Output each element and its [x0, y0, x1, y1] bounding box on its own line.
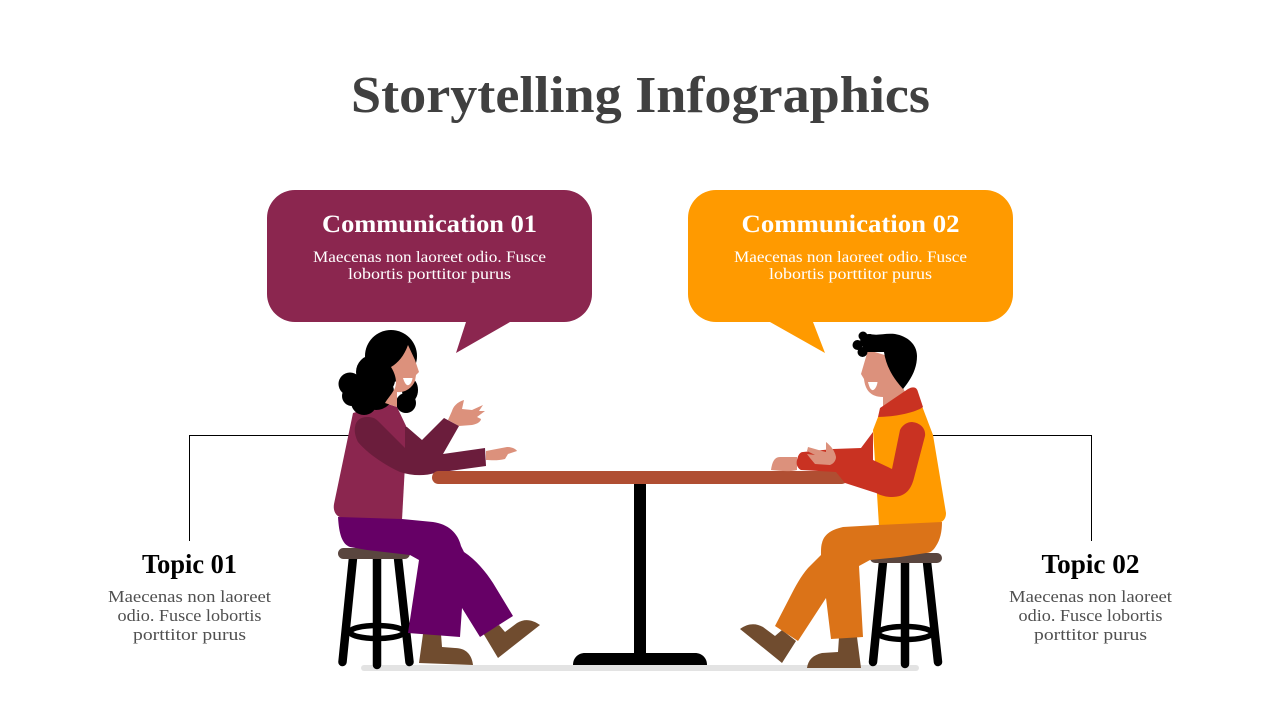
woman trousers — [338, 517, 513, 637]
woman hair back curl — [396, 378, 418, 413]
floor shadow — [361, 665, 919, 671]
man mouth — [868, 382, 878, 390]
speech bubble: communication 01: Maecenas non laoreet odio. Fusce — [313, 249, 546, 266]
woman arm — [355, 417, 486, 475]
topic 02 block: odio. Fusce lobortis — [1018, 606, 1162, 625]
right stool — [870, 553, 942, 664]
connector line: topic 01 — [190, 436, 352, 541]
topic 01 block: Maecenas non laoreet — [108, 587, 271, 606]
topic 02 block: Topic 02 — [1042, 549, 1140, 579]
man boots — [740, 624, 861, 668]
topic 01 block: odio. Fusce lobortis — [118, 606, 262, 625]
speech bubble: communication 02: lobortis porttitor purus — [769, 266, 932, 283]
woman torso — [334, 403, 407, 520]
title: Storytelling Infographics — [351, 67, 930, 124]
table — [432, 471, 848, 665]
man hair — [852, 332, 917, 389]
man torso — [873, 406, 946, 526]
topic 01 block: Topic 01 — [142, 549, 237, 579]
woman figure — [334, 330, 540, 665]
speech bubble: communication 01: Communication 01 — [322, 211, 537, 238]
topic 01 block: porttitor purus — [133, 625, 246, 644]
connector line: topic 02 — [930, 436, 1092, 541]
man neck and face — [861, 350, 905, 407]
woman boots — [419, 620, 540, 665]
speech bubble: communication 02 — [688, 190, 1013, 353]
man lower hand — [771, 457, 797, 471]
woman mouth — [403, 378, 412, 385]
man arm — [797, 422, 925, 497]
speech bubble: communication 01: lobortis porttitor purus — [348, 266, 511, 283]
woman hair — [338, 330, 417, 415]
man figure — [740, 332, 946, 668]
man hood — [878, 387, 923, 417]
woman hands — [448, 400, 517, 460]
speech bubble: communication 01 — [267, 190, 592, 353]
woman neck and face — [385, 345, 419, 407]
topic 02 block: porttitor purus — [1034, 625, 1147, 644]
topic 02 block: Maecenas non laoreet — [1009, 587, 1172, 606]
topic 02 block — [1009, 549, 1172, 644]
speech bubble: communication 02: Maecenas non laoreet odio. Fusce — [734, 249, 967, 266]
left stool — [338, 548, 410, 665]
man trousers — [775, 522, 942, 641]
topic 01 block — [108, 549, 271, 644]
man upper hand — [807, 442, 836, 465]
speech bubble: communication 02: Communication 02 — [742, 211, 960, 238]
